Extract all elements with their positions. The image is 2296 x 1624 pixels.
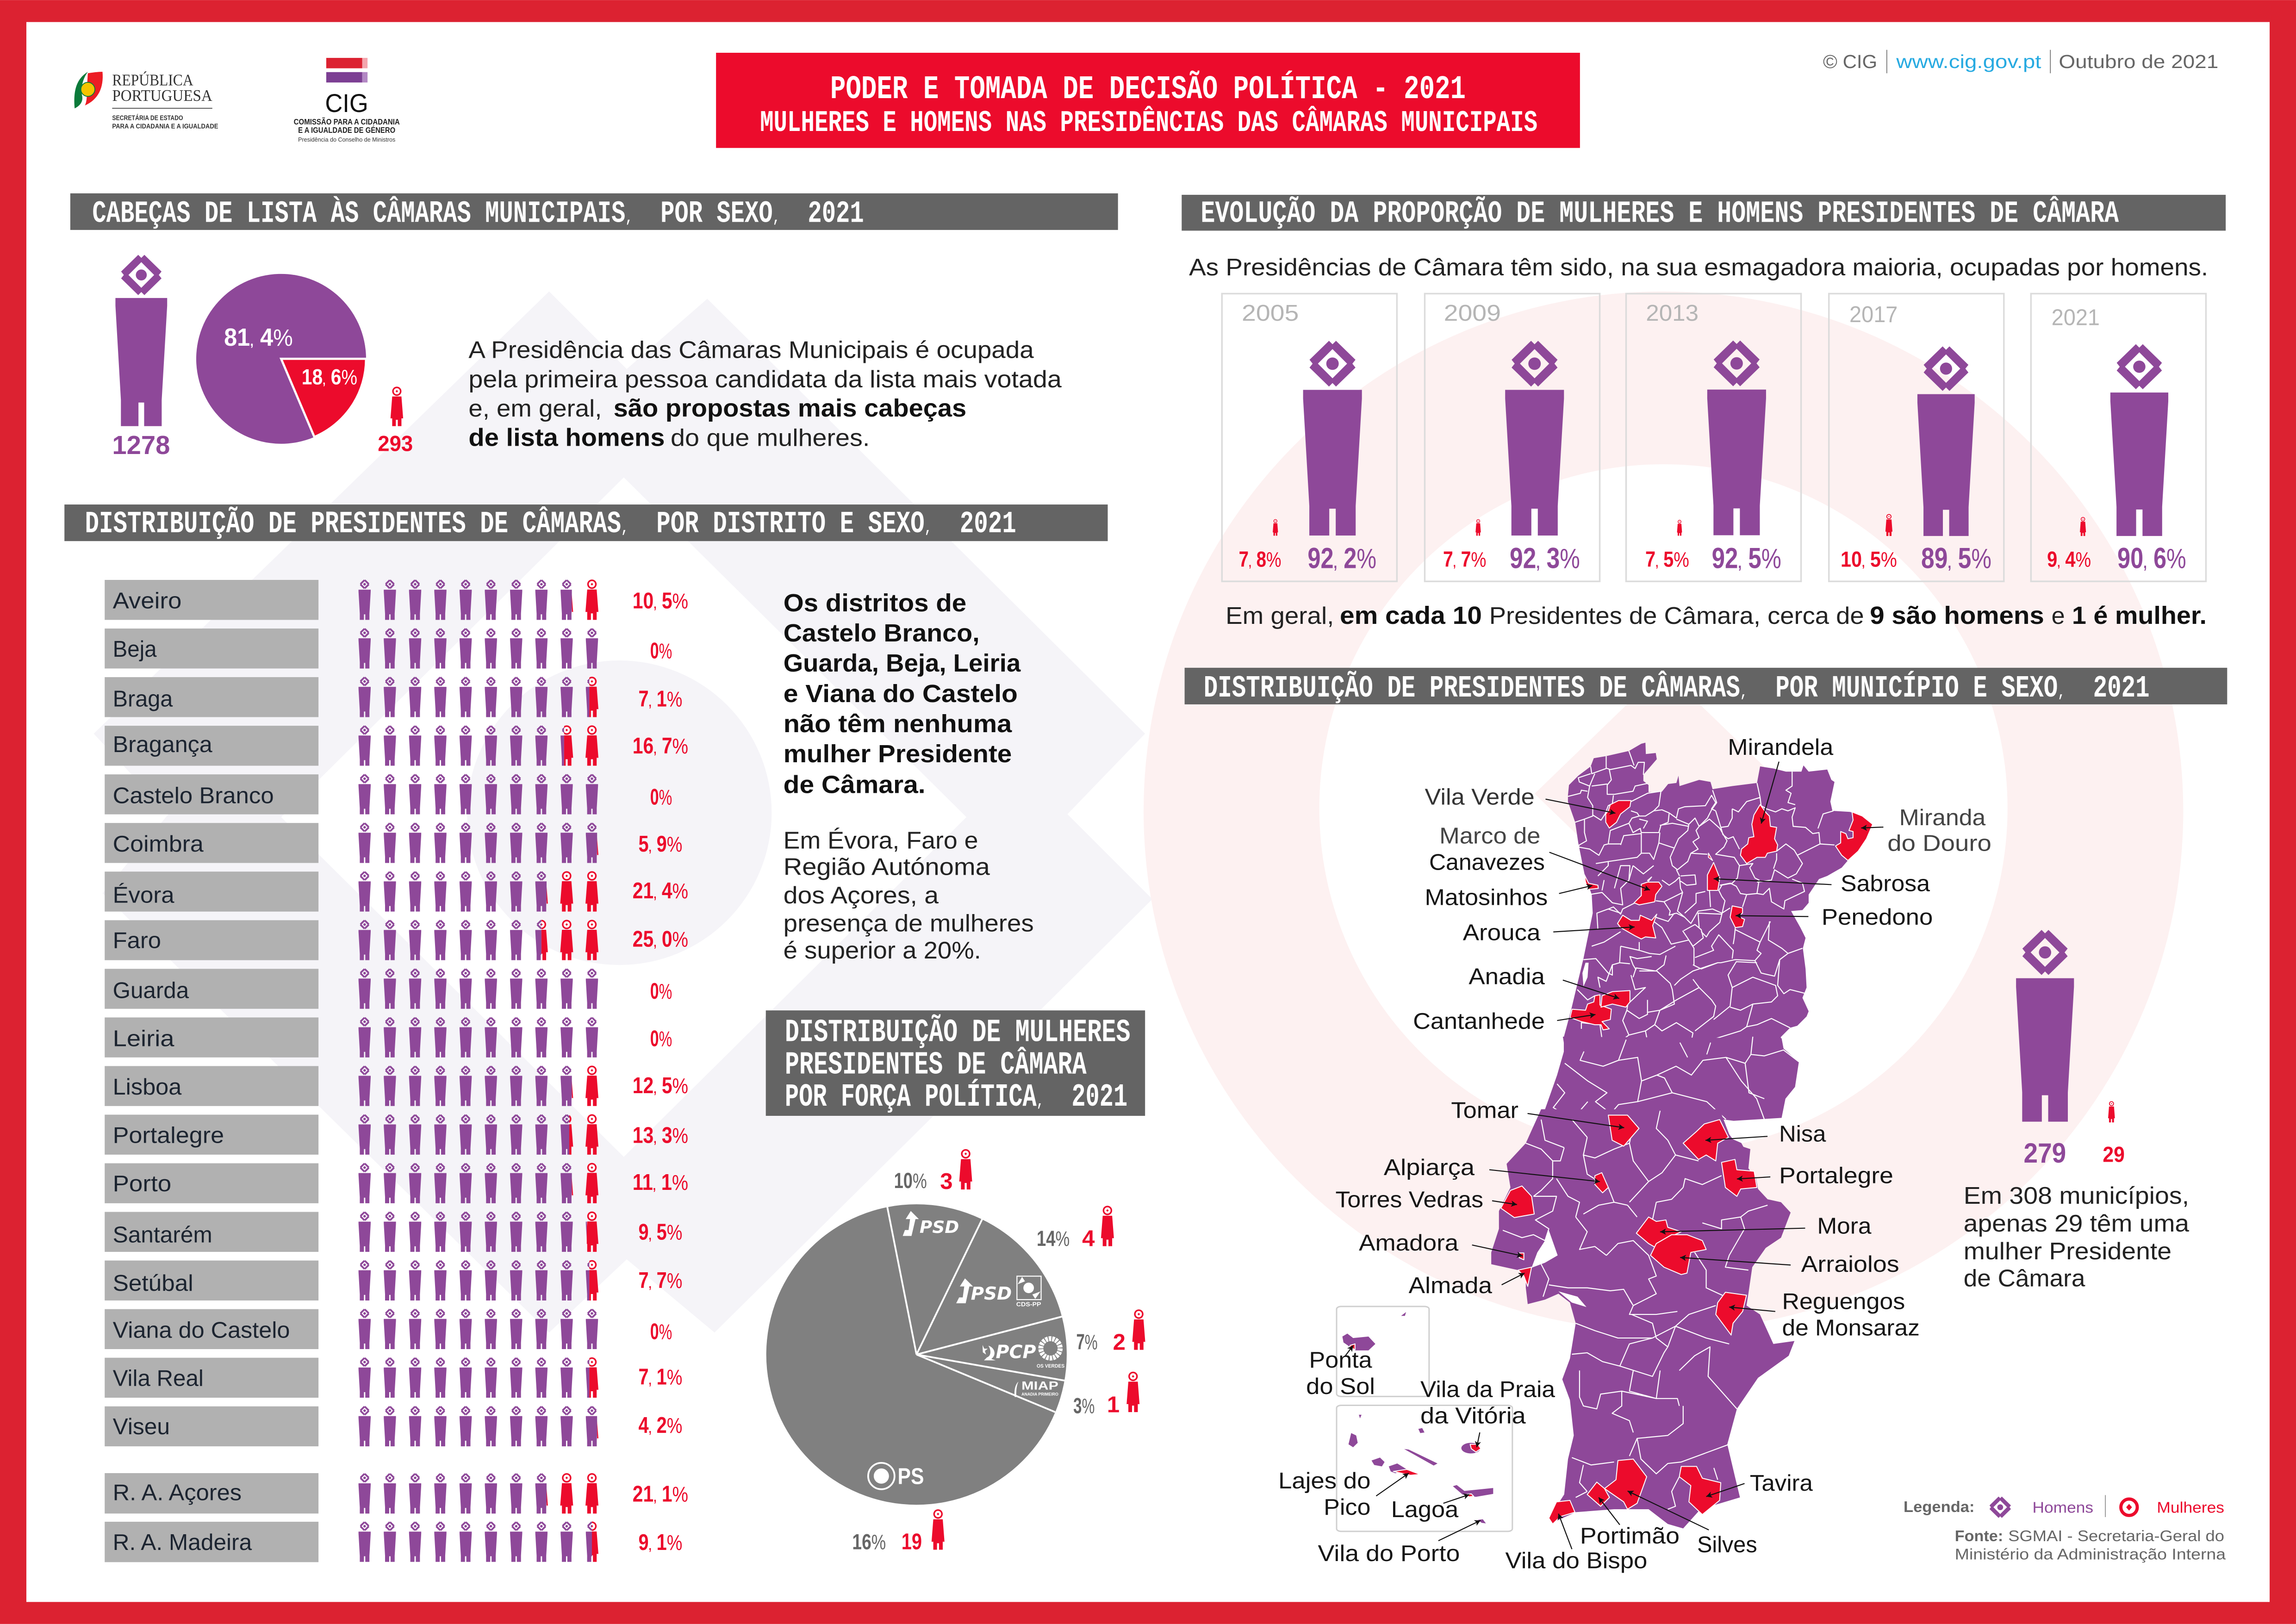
row: Faro: [105, 920, 688, 960]
panel: 2013: 2013: [1646, 301, 1699, 326]
row: Bragança: 16, 7%: [633, 734, 688, 759]
logo: República Portuguesa: SECRETÁRIA DE ESTADO: [112, 114, 183, 122]
row: Faro: Faro: [113, 928, 161, 953]
text: em cada 10: 1 é mulher.: [2072, 602, 2207, 629]
label: PSD 10% 3: 10%: [894, 1169, 927, 1193]
logo: República Portuguesa: PARA A CIDADANIA E A IGUALDADE: [112, 122, 218, 130]
panel: 308 municípios: [1964, 930, 2190, 1292]
map centre: [1545, 1037, 1799, 1157]
text: municípios: de Câmara: [1964, 1265, 2085, 1292]
row: Viana do Castelo: 0%: [650, 1319, 672, 1344]
panel: 2017: [1829, 293, 2004, 581]
row: Viseu: [105, 1406, 682, 1446]
row: Viseu: Viseu: [113, 1414, 170, 1439]
panel: 2021: 90, 6%: [2117, 542, 2186, 575]
map labels and leader lines: Anadia: [1468, 964, 1545, 989]
map labels and leader lines: Vila da Praia: [1420, 1377, 1556, 1402]
logo: CIG: Presidência do Conselho de Ministros: [298, 136, 396, 143]
map labels and leader lines: Pico: [1324, 1495, 1370, 1520]
row: Portalegre: Portalegre: [113, 1123, 224, 1148]
credits: Outubro de 2021: [2059, 51, 2218, 72]
text: municípios: mulher Presidente: [1964, 1238, 2172, 1265]
row: Coimbra: [105, 822, 682, 863]
inset: Açores: [1337, 1406, 1512, 1531]
map labels and leader lines: Marco de: [1439, 824, 1540, 849]
row: Braga: Braga: [113, 687, 173, 712]
row: R. A. Açores: 21, 1%: [633, 1482, 688, 1507]
text: presidência: pela primeira pessoa candidata da lista mais votada: [468, 366, 1062, 393]
row: Porto: [105, 1163, 688, 1203]
label: PSD/CDS 14% 4: 4: [1082, 1226, 1095, 1251]
pie chart: sex split: 18, 6%: [302, 365, 357, 390]
logo: CIG: CIG: [325, 89, 368, 118]
logo: MIAP: MIAP: [1021, 1380, 1058, 1393]
label: PS 16% 19: 16%: [852, 1530, 886, 1555]
watermark: female symbol: [1144, 292, 2183, 1331]
logo: PCP / Os Verdes: OS VERDES: [1037, 1363, 1064, 1369]
row: Faro: 25, 0%: [633, 927, 688, 952]
icon: female 29: [2108, 1101, 2115, 1122]
source: Ministério da Administração Interna: [1955, 1546, 2226, 1563]
row: Évora: 21, 4%: [633, 878, 688, 903]
label: PSD 10% 3: [894, 1149, 972, 1194]
map labels and leader lines: Miranda: [1899, 805, 1986, 830]
map labels and leader lines: Amadora: [1359, 1231, 1459, 1256]
logo: República Portuguesa: [75, 71, 218, 130]
map labels and leader lines: Vila Verde: [1425, 785, 1535, 810]
row: Lisboa: [105, 1065, 688, 1106]
row: R. A. Açores: R. A. Açores: [113, 1481, 242, 1506]
map labels and leader lines: Reguengos: [1782, 1289, 1905, 1314]
row: Braga: 7, 1%: [638, 687, 682, 712]
text: Évora, Faro e Açores: Em Évora, Faro e: [784, 828, 978, 854]
map labels and leader lines: Almada: [1409, 1273, 1493, 1298]
heading: cabeças de lista: [70, 193, 1118, 231]
heading: força política: POR FORÇA POLÍTICA, 2021: [785, 1078, 1127, 1115]
title banner: PODER E TOMADA DE DECISÃO POLÍTICA - 2021: [830, 71, 1466, 108]
pie chart: sex split: 81, 4%: [224, 324, 293, 351]
map labels and leader lines: Nisa: [1779, 1121, 1826, 1146]
row: Vila Real: [105, 1357, 682, 1398]
pie chart: força política: [766, 1204, 1067, 1505]
panel: 2017: 10, 5%: [1841, 548, 1897, 572]
row: Porto: Porto: [113, 1171, 171, 1196]
text: presidência: do que mulheres.: [671, 425, 870, 452]
heading: força política: [766, 1010, 1145, 1116]
source: [1955, 1528, 2226, 1563]
logo: PS: [868, 1463, 924, 1489]
map labels and leader lines: Mora: [1817, 1214, 1872, 1239]
number: 29: 29: [2103, 1143, 2125, 1167]
panel: 2009: [1425, 293, 1600, 581]
row: Beja: [105, 628, 672, 668]
row: Portalegre: [105, 1114, 688, 1155]
label: MIAP 3% 1: 1: [1107, 1393, 1120, 1418]
text: distritos sem mulheres: [784, 589, 1021, 798]
logo: PSD / CDS-PP: CDS-PP: [1016, 1301, 1041, 1307]
row: Viana do Castelo: [105, 1309, 672, 1349]
row: Viseu: 4, 2%: [638, 1413, 682, 1438]
row: Guarda: [105, 968, 672, 1009]
map labels and leader lines: Canavezes: [1429, 850, 1545, 875]
text: Évora, Faro e Açores: dos Açores, a: [784, 882, 939, 909]
panel: 2021: 9, 4%: [2047, 548, 2091, 572]
logo: PS: PS: [897, 1464, 924, 1489]
row: Portalegre: 13, 3%: [633, 1123, 688, 1148]
row: Santarém: 9, 5%: [638, 1220, 682, 1244]
panel: 2005: 7, 8%: [1239, 548, 1281, 572]
text: presidência: de lista homens: [468, 424, 665, 452]
logo: PCP / Os Verdes: [983, 1339, 1064, 1369]
row: Braga: [105, 677, 682, 717]
label: PCP 7% 2: 7%: [1076, 1330, 1098, 1354]
text: evolução intro: As Presidências de Câmara têm sido, na sua esmagadora maioria, ocupadas por homens.: [1189, 254, 2208, 281]
text: em cada 10: e: [2052, 603, 2065, 629]
map labels and leader lines: Matosinhos: [1425, 885, 1548, 910]
row: Bragança: [105, 725, 688, 766]
icon: female 293: [391, 386, 403, 426]
panel: 2017: 2017: [1849, 302, 1898, 327]
row: R. A. Açores: [105, 1473, 688, 1513]
map labels and leader lines: Portimão: [1580, 1524, 1680, 1549]
label: PSD 10% 3: 3: [940, 1169, 953, 1194]
label: MIAP 3% 1: 3%: [1073, 1394, 1095, 1418]
map labels and leader lines: Ponta: [1309, 1348, 1372, 1373]
row: Évora: Évora: [113, 883, 174, 908]
text: presidência: são propostas mais cabeças: [614, 394, 966, 422]
heading: município: DISTRIBUIÇÃO DE PRESIDENTES DE CÂMARAS, POR MUNICÍPIO E SEXO, 2021: [1204, 671, 2150, 706]
row: Coimbra: Coimbra: [113, 832, 204, 857]
text: distritos sem mulheres: Os distritos de: [784, 589, 966, 617]
label: PCP 7% 2: 2: [1113, 1330, 1126, 1355]
row: Aveiro: Aveiro: [113, 589, 181, 614]
map north: traced outline and borders: [1564, 743, 1873, 1054]
inset: Madeira: [1337, 1307, 1429, 1396]
credits: © CIG: [1823, 51, 1877, 72]
logo: PSD / CDS-PP: PSD: [971, 1283, 1012, 1304]
text: Évora, Faro e Açores: é superior a 20%.: [784, 937, 981, 964]
text: presidência: [468, 337, 1062, 452]
text: Évora, Faro e Açores: [784, 828, 1034, 964]
row: Leiria: 0%: [650, 1027, 672, 1052]
map labels and leader lines: Mirandela: [1728, 735, 1834, 760]
logo: CIG: E A IGUALDADE DE GÉNERO: [298, 126, 395, 135]
legend: [1904, 1495, 2224, 1518]
logo: PCP / Os Verdes: PCP: [996, 1342, 1036, 1363]
map labels and leader lines: Lajes do: [1278, 1468, 1370, 1493]
row: Castelo Branco: 0%: [650, 785, 672, 810]
title banner: MULHERES E HOMENS NAS PRESIDÊNCIAS DAS CÂMARAS MUNICIPAIS: [760, 106, 1537, 140]
panel: 2005: [1222, 293, 1397, 581]
icon: male 279: [2016, 930, 2074, 1122]
row: Setúbal: 7, 7%: [638, 1268, 682, 1293]
row: Castelo Branco: Castelo Branco: [113, 784, 274, 809]
label: PS 16% 19: [852, 1509, 945, 1555]
logo: PSD: [903, 1211, 959, 1237]
panel: 2009: 92, 3%: [1510, 542, 1580, 575]
number: 1278: 1278: [112, 430, 170, 460]
logo: MIAP: ANADIA PRIMEIRO: [1021, 1392, 1058, 1397]
heading: força política: PRESIDENTES DE CÂMARA: [785, 1046, 1087, 1083]
text: em cada 10: Em geral,: [1226, 603, 1334, 629]
row: Lisboa: 12, 5%: [633, 1073, 688, 1098]
row: Bragança: Bragança: [113, 732, 212, 757]
row: Vila Real: Vila Real: [113, 1366, 204, 1391]
panel: 2005: 92, 2%: [1307, 542, 1376, 575]
watermark: male symbol: [93, 292, 1152, 1332]
number: 293: 293: [378, 432, 413, 456]
legend: Legenda:: [1904, 1499, 1975, 1516]
row: Aveiro: 10, 5%: [633, 589, 688, 614]
text: municípios: [1964, 1182, 2190, 1292]
title banner: [716, 53, 1580, 148]
logo: CIG: COMISSÃO PARA A CIDADANIA: [294, 117, 400, 126]
legend: Mulheres: [2157, 1499, 2224, 1516]
row: Beja: Beja: [113, 637, 157, 662]
text: presidência: A Presidência das Câmaras Municipais é ocupada: [468, 337, 1034, 364]
row: Santarém: Santarém: [113, 1223, 212, 1248]
row: R. A. Madeira: [105, 1521, 682, 1562]
map south: [1337, 1109, 1794, 1531]
heading: distribuição por distrito: DISTRIBUIÇÃO DE PRESIDENTES DE CÂMARAS, POR DISTRITO E SEXO, 2021: [85, 506, 1016, 541]
row: Beja: 0%: [650, 638, 672, 663]
text: municípios: Em 308 municípios,: [1964, 1182, 2189, 1209]
logo: PSD / CDS-PP: [956, 1276, 1041, 1307]
map labels and leader lines: do Sol: [1306, 1374, 1375, 1399]
panel: 2009: 7, 7%: [1443, 548, 1486, 572]
label: MIAP 3% 1: [1073, 1372, 1139, 1418]
logo: República Portuguesa: PORTUGUESA: [112, 87, 212, 105]
row: Évora: [105, 871, 688, 912]
map labels and leader lines: do Douro: [1887, 831, 1991, 856]
text: em cada 10: em cada 10: [1340, 602, 1482, 629]
panel: 2021: 2021: [2052, 305, 2100, 330]
text: em cada 10: 9 são homens: [1870, 602, 2044, 629]
text: distritos sem mulheres: Castelo Branco,: [784, 619, 980, 647]
map labels and leader lines: Lagoa: [1391, 1497, 1459, 1522]
map labels and leader lines: Tomar: [1451, 1098, 1518, 1123]
pie chart: sex split: [196, 274, 366, 444]
text: distritos sem mulheres: e Viana do Castelo: [784, 680, 1018, 708]
municipalities: south in red: [1501, 1115, 1757, 1524]
map labels and leader lines: Portalegre: [1779, 1164, 1893, 1188]
panel: 2009: 2009: [1444, 301, 1501, 326]
row: Leiria: [105, 1017, 672, 1058]
row: Santarém: [105, 1212, 682, 1252]
panel: 2013: [1626, 293, 1801, 581]
text: presidência: e, em geral,: [468, 395, 602, 422]
text: municípios: apenas 29 têm uma: [1964, 1210, 2190, 1237]
row: Guarda: Guarda: [113, 978, 189, 1003]
map labels and leader lines: Alpiarça: [1384, 1155, 1475, 1180]
map: Portugal municipalities: [1337, 743, 1873, 1531]
number: 279: 279: [2024, 1138, 2066, 1169]
credits: [1823, 50, 2218, 73]
map labels and leader lines: Penedono: [1822, 905, 1933, 930]
row: Leiria: Leiria: [113, 1027, 174, 1052]
row: Castelo Branco: [105, 774, 672, 815]
map labels and leader lines: Tavira: [1750, 1471, 1813, 1496]
text: distritos sem mulheres: não têm nenhuma: [784, 710, 1012, 738]
panel: 2021: [2031, 293, 2206, 581]
source: Fonte:: [1955, 1528, 2003, 1545]
row: R. A. Madeira: 9, 1%: [638, 1530, 682, 1555]
text: distritos sem mulheres: mulher Presidente: [784, 740, 1012, 768]
text: em cada 10: [1226, 602, 2207, 629]
panel: cabeças de lista: [112, 255, 1062, 460]
text: distritos sem mulheres: de Câmara.: [784, 771, 926, 798]
heading: força política: DISTRIBUIÇÃO DE MULHERES: [785, 1014, 1131, 1051]
municipalities: north in red: [1570, 801, 1873, 1030]
map labels and leader lines: de Monsaraz: [1782, 1316, 1920, 1341]
map labels and leader lines: da Vitória: [1420, 1403, 1526, 1428]
text: distritos sem mulheres: Guarda, Beja, Leiria: [784, 649, 1021, 677]
legend: Homens: [2032, 1499, 2093, 1516]
map labels and leader lines: Arraiolos: [1801, 1252, 1899, 1277]
icon: male 1278: [115, 255, 167, 426]
label: PSD/CDS 14% 4: [1037, 1206, 1114, 1251]
map labels and leader lines: Vila do Bispo: [1505, 1549, 1647, 1574]
source: SGMAI - Secretaria-Geral do: [2008, 1528, 2224, 1545]
map labels and leader lines: Cantanhede: [1413, 1009, 1545, 1034]
logo: República Portuguesa: REPÚBLICA: [112, 71, 193, 89]
text: em cada 10: Presidentes de Câmara, cerca de: [1489, 603, 1864, 629]
row: Setúbal: Setúbal: [113, 1271, 193, 1296]
panel: 2013: 92, 5%: [1712, 542, 1781, 575]
row: Setúbal: [105, 1260, 682, 1300]
map labels and leader lines: Arouca: [1463, 920, 1541, 945]
row: Coimbra: 5, 9%: [638, 832, 682, 857]
panel: 2005: 2005: [1242, 301, 1299, 326]
text: Évora, Faro e Açores: Região Autónoma: [784, 854, 990, 881]
row: Aveiro: [105, 579, 688, 620]
row: Guarda: 0%: [650, 979, 672, 1004]
row: R. A. Madeira: R. A. Madeira: [113, 1530, 252, 1555]
row: Lisboa: Lisboa: [113, 1075, 182, 1100]
label: PCP 7% 2: [1076, 1309, 1145, 1355]
map labels and leader lines: Sabrosa: [1841, 871, 1930, 896]
row: Vila Real: 7, 1%: [638, 1365, 682, 1390]
map labels and leader lines: Silves: [1697, 1532, 1757, 1557]
logo: CIG: [294, 58, 400, 143]
heading: cabeças de lista: CABEÇAS DE LISTA ÀS CÂMARAS MUNICIPAIS, POR SEXO, 2021: [92, 196, 864, 231]
map labels and leader lines: Torres Vedras: [1335, 1188, 1483, 1213]
row: Porto: 11, 1%: [633, 1170, 688, 1195]
label: PS 16% 19: 19: [902, 1530, 922, 1555]
panel: 2017: 89, 5%: [1921, 542, 1991, 575]
map labels and leader lines: Vila do Porto: [1318, 1541, 1460, 1566]
text: Évora, Faro e Açores: presença de mulheres: [784, 910, 1034, 937]
credits: www.cig.gov.pt: [1896, 51, 2041, 72]
map labels and leader lines: [1278, 735, 1991, 1574]
logo: MIAP: [1014, 1380, 1058, 1397]
row: Viana do Castelo: Viana do Castelo: [113, 1318, 290, 1343]
logo: PSD: PSD: [920, 1217, 959, 1237]
panel: district table: [105, 579, 688, 1562]
panel: 2013: 7, 5%: [1645, 548, 1689, 572]
label: PSD/CDS 14% 4: 14%: [1037, 1226, 1070, 1251]
